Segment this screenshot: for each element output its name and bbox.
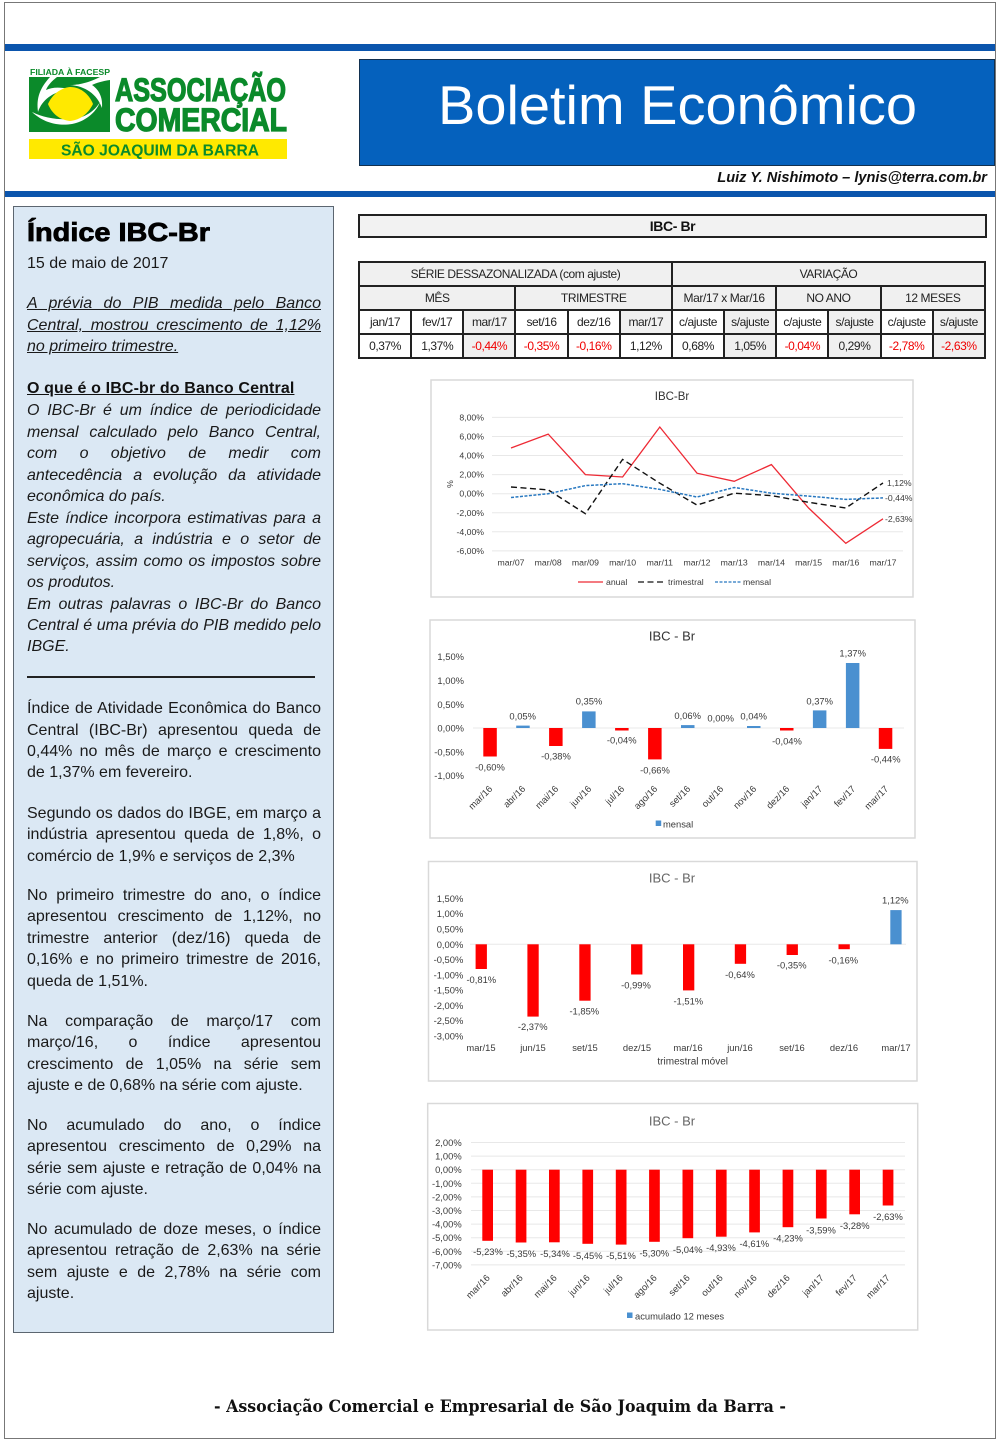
x axis labels: dez/16 xyxy=(830,1042,858,1053)
value labels: -2,37% xyxy=(518,1021,548,1032)
y axis labels: -3,00% xyxy=(432,1205,462,1216)
date: 15 de maio de 2017 xyxy=(27,255,168,272)
bar chart: acumulado 12 meses xyxy=(427,1102,918,1331)
x axis labels: fev/17 xyxy=(833,1272,859,1298)
axis title: trimestral móvel xyxy=(657,1056,728,1068)
value labels: -1,85% xyxy=(569,1006,599,1016)
article text xyxy=(26,217,322,1302)
x axis labels xyxy=(466,783,890,812)
data table: -2,78% xyxy=(889,339,924,353)
paragraph: dados do IBGE xyxy=(27,805,322,865)
x axis labels: ago/16 xyxy=(631,1272,659,1300)
value labels: -0,04% xyxy=(607,734,637,746)
paragraph: doze meses: sem ajuste e de 2,78% na série com xyxy=(27,1264,321,1281)
y axis labels: 2,00% xyxy=(435,1137,462,1148)
bars xyxy=(476,910,902,1017)
data table: fev/17 xyxy=(422,315,452,329)
end labels: -2,63% xyxy=(885,514,913,524)
paragraph: atividade econômica: Índice de Atividade Econômica do Banco xyxy=(27,700,321,717)
x axis labels: set/16 xyxy=(667,783,692,809)
subheading: O que é o IBC-br do Banco Central xyxy=(27,380,294,397)
y axis labels: 4,00% xyxy=(459,450,484,460)
y axis labels: 0,00% xyxy=(437,939,463,950)
value labels: -4,93% xyxy=(706,1242,736,1253)
paragraph: dados do IBGE: Segundo os dados do IBGE, em março a xyxy=(27,805,321,822)
y axis labels: 1,50% xyxy=(437,893,463,904)
paragraph: atividade econômica: de 1,37% em fevereiro. xyxy=(27,764,192,781)
definition paragraph: IBGE. xyxy=(27,638,70,655)
paragraph: comparação março xyxy=(27,1013,321,1094)
data table: s/ajuste xyxy=(835,315,873,329)
x axis labels: ago/16 xyxy=(631,783,659,811)
y axis labels: -1,00% xyxy=(434,969,463,980)
x axis labels xyxy=(463,1272,892,1301)
value labels xyxy=(473,1211,903,1261)
x axis labels: mar/09 xyxy=(572,558,599,568)
data table: -0,44% xyxy=(472,339,507,353)
value labels: -0,60% xyxy=(475,762,505,772)
data table: 1,05% xyxy=(734,339,766,353)
definition paragraph: os produtos. xyxy=(27,574,115,591)
end labels: -0,44% xyxy=(885,493,913,503)
paragraph: comparação março: março/16, o índice apresentou xyxy=(27,1034,321,1051)
y axis labels xyxy=(456,412,484,556)
legend: trimestral xyxy=(668,577,704,587)
logo: Associação Comercial: FILIADA À FACESP xyxy=(30,68,111,77)
data table: VARIAÇÃO xyxy=(800,267,857,281)
value labels: 0,35% xyxy=(576,696,602,706)
y axis labels xyxy=(432,1137,462,1270)
value labels: -0,35% xyxy=(777,960,807,970)
x axis labels: dez/16 xyxy=(764,783,791,811)
end labels xyxy=(885,478,913,524)
paragraph: acumulado do ano xyxy=(27,1117,322,1198)
intro paragraph: no primeiro trimestre. xyxy=(27,338,178,355)
paragraph: atividade econômica: 0,44% no mês de março e crescimento xyxy=(27,743,321,760)
value labels: 1,37% xyxy=(839,648,866,658)
data table: Mar/17 x Mar/16 xyxy=(684,291,765,305)
y axis labels: 1,00% xyxy=(437,908,463,919)
paragraph: atividade econômica: Central (IBC-Br) apresentou queda de xyxy=(27,722,321,739)
x axis labels: jul/16 xyxy=(602,783,626,807)
data table: s/ajuste xyxy=(940,315,978,329)
panel heading: Índice IBC-Br xyxy=(27,217,210,247)
author byline: Luiz Y. Nishimoto – lynis@terra.com.br xyxy=(717,170,987,186)
data table: c/ajuste xyxy=(679,315,717,329)
intro paragraph: A prévia do PIB medida pelo Banco xyxy=(27,295,321,312)
value labels: 1,12% xyxy=(882,894,909,906)
data table: 0,68% xyxy=(682,339,714,353)
y axis labels: 0,50% xyxy=(437,924,463,934)
x axis labels: jul/16 xyxy=(601,1272,625,1296)
definition paragraph: econômica do país. xyxy=(27,488,166,505)
y axis labels: -2,50% xyxy=(434,1015,463,1026)
x axis labels: jun/15 xyxy=(519,1042,546,1053)
y axis labels: 1,50% xyxy=(437,651,464,662)
y axis labels: 1,00% xyxy=(437,675,464,686)
definition paragraph: Em outras palavras o IBC-Br do Banco xyxy=(27,596,321,613)
paragraph: atividade econômica xyxy=(27,699,321,781)
chart title: IBC - Br xyxy=(649,1114,696,1128)
x axis labels: mai/16 xyxy=(533,783,560,811)
paragraph: primeiro trimestre: apresentou crescimento de 1,12%, no xyxy=(27,908,321,925)
series: trimestral xyxy=(511,459,883,514)
y axis labels: -0,50% xyxy=(434,954,463,965)
data table: set/16 xyxy=(526,315,557,329)
y axis labels: -0,50% xyxy=(434,746,464,757)
banner: Boletim Econômico xyxy=(359,59,995,166)
x axis labels: mar/08 xyxy=(535,558,562,568)
paragraph: doze meses: apresentou retração de 2,63% na série xyxy=(27,1242,321,1259)
intro paragraph xyxy=(26,295,321,355)
y axis labels: -1,00% xyxy=(434,770,464,781)
x axis labels: set/16 xyxy=(666,1272,692,1298)
definition paragraph xyxy=(27,402,321,655)
x axis labels: mar/17 xyxy=(869,558,897,568)
value labels: -0,04% xyxy=(772,736,802,746)
x axis labels: out/16 xyxy=(699,1272,725,1298)
value labels: -5,04% xyxy=(673,1244,703,1255)
value labels: -0,16% xyxy=(828,954,858,966)
y axis labels: -2,00% xyxy=(434,1000,463,1011)
x axis labels: nov/16 xyxy=(731,783,758,811)
y axis labels: -4,00% xyxy=(456,527,484,537)
value labels: -0,44% xyxy=(871,754,901,764)
paragraph: primeiro trimestre: 0,16% e no primeiro trimestre de 2016, xyxy=(27,951,321,968)
y axis labels: -1,50% xyxy=(434,984,463,996)
x axis labels: mar/15 xyxy=(795,558,822,568)
x axis labels: mar/14 xyxy=(758,558,785,568)
definition paragraph: O IBC-Br é um índice de periodicidade xyxy=(27,402,321,419)
x axis labels: mar/13 xyxy=(721,558,748,568)
x axis labels: jun/16 xyxy=(726,1042,753,1053)
x axis labels: mar/17 xyxy=(863,1272,892,1301)
data table: dez/16 xyxy=(577,315,610,329)
paragraph: doze meses xyxy=(27,1221,321,1302)
data table xyxy=(358,261,986,359)
x axis labels: jun/16 xyxy=(565,1272,592,1299)
x axis labels: dez/15 xyxy=(623,1042,651,1053)
paragraph: dados do IBGE: comércio de 1,9% e serviços de 2,3% xyxy=(27,848,295,865)
x axis labels: jun/16 xyxy=(567,783,593,810)
x axis labels: mar/16 xyxy=(466,783,494,812)
bar chart: mensal xyxy=(429,619,916,839)
intro paragraph: Central, mostrou crescimento de 1,12% xyxy=(27,317,321,334)
y axis labels: 0,50% xyxy=(437,699,464,710)
bars xyxy=(483,663,892,759)
x axis labels: mar/16 xyxy=(463,1272,492,1301)
data table: mar/17 xyxy=(628,315,663,329)
definition paragraph: Central é uma prévia do PIB medido pelo xyxy=(27,617,321,634)
paragraph: comparação março: Na comparação de março/17 com xyxy=(27,1013,321,1030)
value labels: -2,63% xyxy=(873,1211,903,1222)
value labels: -5,45% xyxy=(573,1250,603,1261)
legend: mensal xyxy=(743,577,771,587)
chart title: IBC - Br xyxy=(649,870,696,886)
x axis labels: set/16 xyxy=(779,1042,805,1053)
y axis labels: -6,00% xyxy=(456,546,484,556)
table heading: IBC- Br: IBC- Br xyxy=(650,218,695,234)
chart title: IBC - Br xyxy=(649,628,696,644)
data table: SÉRIE DESSAZONALIZADA (com ajuste) xyxy=(411,267,620,281)
data table: s/ajuste xyxy=(731,315,769,329)
data table: mar/17 xyxy=(472,315,507,329)
data table: -0,16% xyxy=(576,339,611,353)
data table: MÊS xyxy=(425,291,450,305)
y axis labels: 6,00% xyxy=(459,432,484,442)
y axis labels: -1,00% xyxy=(432,1178,462,1189)
data table: -0,35% xyxy=(524,339,559,353)
logo: Associação Comercial: SÃO JOAQUIM DA BARRA xyxy=(61,140,259,160)
value labels: -5,23% xyxy=(473,1246,503,1257)
paragraph: acumulado do ano: apresentou crescimento de 0,29% na xyxy=(27,1138,321,1155)
x axis labels: out/16 xyxy=(699,783,725,809)
x axis labels: dez/16 xyxy=(764,1272,792,1300)
value labels: -4,61% xyxy=(739,1238,769,1249)
x axis labels: mar/07 xyxy=(497,558,525,568)
y axis labels: -2,00% xyxy=(432,1191,462,1202)
logo: Associação Comercial xyxy=(29,68,287,160)
x axis labels xyxy=(466,1042,911,1053)
paragraph: doze meses: ajuste. xyxy=(27,1285,74,1302)
bars xyxy=(482,1170,893,1245)
x axis labels: mai/16 xyxy=(531,1272,559,1300)
icon: green and yellow emblem xyxy=(29,77,110,132)
x axis labels xyxy=(497,558,897,568)
x axis labels: set/15 xyxy=(572,1042,598,1053)
y axis labels: -4,00% xyxy=(432,1219,462,1230)
value labels: 0,05% xyxy=(509,710,536,722)
paragraph: comparação março: crescimento de 1,05% na série sem xyxy=(27,1056,321,1073)
legend: mensal xyxy=(663,818,693,830)
value labels: -0,38% xyxy=(541,750,571,762)
y axis labels: -5,00% xyxy=(432,1232,462,1243)
x axis labels: jan/17 xyxy=(799,1272,826,1299)
value labels: -4,23% xyxy=(773,1232,803,1244)
y axis labels: 2,00% xyxy=(459,470,484,480)
data table: c/ajuste xyxy=(783,315,821,329)
value labels: -5,51% xyxy=(606,1250,636,1261)
paragraph: acumulado do ano: No acumulado do ano, o índice xyxy=(27,1117,321,1134)
panel: Índice IBC-Br text column xyxy=(13,206,334,1333)
top blue rule xyxy=(5,44,995,51)
legend: acumulado 12 meses xyxy=(635,1310,724,1322)
table heading: IBC- Br xyxy=(358,214,987,238)
legend: anual xyxy=(606,577,627,587)
y axis labels xyxy=(434,893,463,1041)
y axis unit: % xyxy=(445,480,455,488)
definition paragraph: Este índice incorpora estimativas para a xyxy=(27,510,321,527)
line chart: IBC-Br anual, trimestral, mensal xyxy=(430,379,914,598)
paragraph: primeiro trimestre xyxy=(27,887,321,990)
paragraph: comparação março: ajuste e de 0,68% na série com ajuste. xyxy=(27,1077,303,1094)
paragraph: dados do IBGE: indústria apresentou queda de 1,8%, o xyxy=(27,826,321,843)
value labels: -3,59% xyxy=(806,1224,836,1236)
value labels xyxy=(466,894,909,1032)
value labels: -5,35% xyxy=(506,1248,536,1259)
data table: -2,63% xyxy=(941,339,977,353)
legend xyxy=(578,577,771,587)
paragraph: primeiro trimestre: trimestre anterior (dez/16) queda de xyxy=(27,930,321,947)
x axis labels: mar/11 xyxy=(647,558,673,568)
definition paragraph: antecedência a evolução da atividade xyxy=(27,467,321,484)
value labels: 0,06% xyxy=(674,710,701,721)
data table: 12 MESES xyxy=(905,291,960,305)
x axis labels: mar/17 xyxy=(881,1042,911,1053)
data table: NO ANO xyxy=(806,291,850,305)
x axis labels: abr/16 xyxy=(498,1272,525,1299)
x axis labels: mar/10 xyxy=(609,558,636,568)
x axis labels: nov/16 xyxy=(731,1272,759,1300)
paragraph: doze meses: No acumulado de doze meses, o índice xyxy=(27,1221,321,1238)
x axis labels: fev/17 xyxy=(832,783,857,809)
definition paragraph: mensal calculado pelo Banco Central, xyxy=(27,424,321,441)
y axis labels: 0,00% xyxy=(459,489,484,499)
definition paragraph: serviços, assim como os impostos sobre xyxy=(27,553,321,570)
series: mensal xyxy=(511,484,883,499)
paragraph: acumulado do ano: série sem ajuste e retração de 0,04% na xyxy=(27,1160,321,1177)
value labels: -0,66% xyxy=(640,764,670,776)
value labels: -5,34% xyxy=(540,1248,570,1259)
data table: 1,12% xyxy=(630,339,662,353)
x axis labels: mar/12 xyxy=(683,558,711,568)
value labels: 0,37% xyxy=(806,696,833,706)
paragraph: primeiro trimestre: queda de 1,51%. xyxy=(27,973,148,990)
y axis labels xyxy=(434,651,464,781)
y axis labels: 0,00% xyxy=(437,722,464,734)
data table: TRIMESTRE xyxy=(561,291,626,305)
value labels xyxy=(475,648,901,776)
definition paragraph: com o objetivo de medir com xyxy=(27,445,321,462)
y axis labels: 0,00% xyxy=(435,1164,462,1175)
x axis labels: mar/17 xyxy=(862,783,890,812)
y axis labels: -2,00% xyxy=(456,508,484,518)
x axis labels: mar/15 xyxy=(466,1042,496,1053)
definition paragraph: agropecuária, a indústria e o setor de xyxy=(27,531,321,548)
value labels: 0,04% xyxy=(740,710,767,722)
value labels: -5,30% xyxy=(639,1248,669,1258)
data table: 0,37% xyxy=(369,339,401,353)
value labels: -0,64% xyxy=(725,969,755,980)
x axis labels: mar/16 xyxy=(832,558,859,568)
data table: 1,37% xyxy=(421,339,453,353)
series: anual xyxy=(511,427,883,543)
x axis labels: jan/17 xyxy=(798,783,824,810)
x axis labels: abr/16 xyxy=(501,783,527,810)
value labels: 0,00% xyxy=(707,712,734,724)
data table: -0,04% xyxy=(785,339,820,353)
y axis labels: -3,00% xyxy=(434,1030,463,1041)
value labels: -3,28% xyxy=(840,1220,870,1231)
data table: c/ajuste xyxy=(888,315,926,329)
bar chart: trimestral móvel xyxy=(428,860,918,1082)
value labels: -1,51% xyxy=(673,996,703,1006)
y axis labels: 1,00% xyxy=(435,1151,462,1162)
y axis labels: -6,00% xyxy=(432,1246,462,1257)
chart title: IBC-Br xyxy=(655,391,689,403)
bottom header blue rule xyxy=(5,191,995,197)
value labels: -0,99% xyxy=(621,980,651,990)
y axis labels: -7,00% xyxy=(432,1259,462,1270)
banner: Boletim Econômico: Boletim Econômico xyxy=(438,74,917,136)
paragraph: acumulado do ano: série com ajuste. xyxy=(27,1181,148,1198)
value labels: -0,81% xyxy=(466,974,496,985)
data table: 0,29% xyxy=(839,339,870,353)
data table: jan/17 xyxy=(370,315,400,329)
paragraph: primeiro trimestre: No primeiro trimestre do ano, o índice xyxy=(27,887,321,904)
x axis labels: mar/16 xyxy=(673,1042,703,1053)
end labels: 1,12% xyxy=(887,478,912,488)
y axis labels: 8,00% xyxy=(459,412,484,422)
